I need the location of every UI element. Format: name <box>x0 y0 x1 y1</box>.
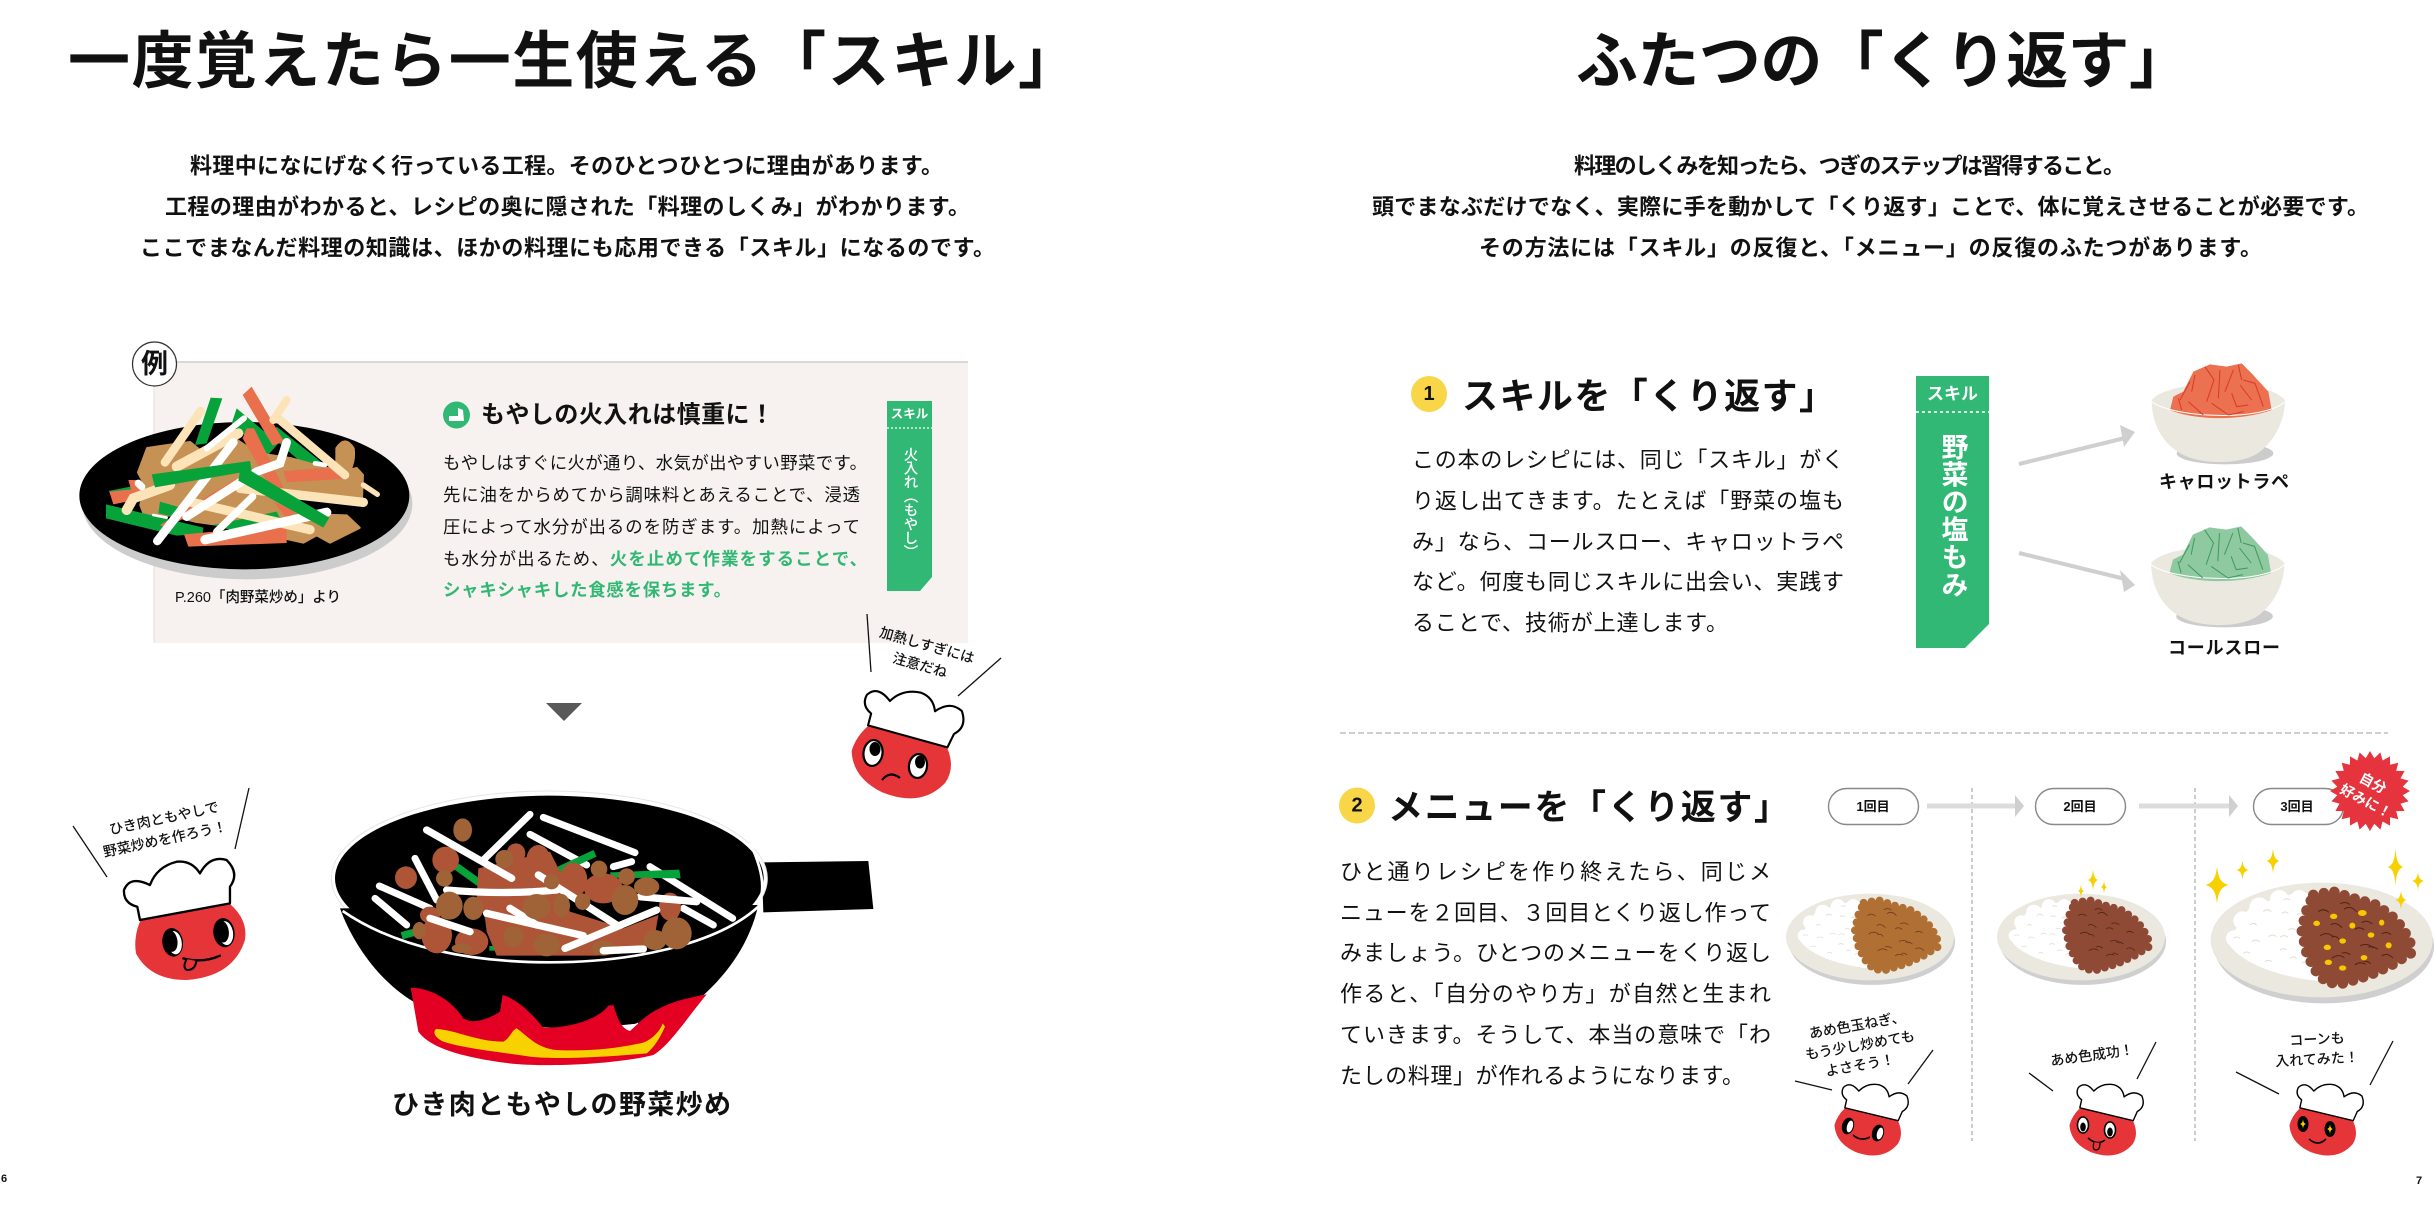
intro text: right page: 料理のしくみを知ったら、つぎのステップは習得すること。 <box>1574 154 2125 178</box>
icon: arm skill mark <box>443 402 470 428</box>
sparkles: plate 3 <box>2206 848 2424 910</box>
illustration: curry plate 2 <box>1997 894 2166 985</box>
panel: example skill card <box>79 342 968 643</box>
flame <box>411 988 707 1065</box>
tag: skill ribbon <box>887 401 932 591</box>
speech: chef 3: 入れてみた！ <box>2275 1049 2359 1069</box>
character: chef 1 <box>1821 1070 1918 1166</box>
arrow: down triangle <box>546 703 582 721</box>
starburst badge: 自分 <box>2357 769 2389 797</box>
caption: recipe reference: P.260「肉野菜炒め」より <box>175 589 341 606</box>
tag: skill ribbon: 火入れ（もやし） <box>902 447 918 559</box>
label: coleslaw: コールスロー <box>2168 638 2280 658</box>
dish name: ひき肉ともやしの野菜炒め <box>392 1090 731 1120</box>
label: carrot rapee: キャロットラペ <box>2159 472 2289 492</box>
intro text: right page <box>1372 154 2369 260</box>
section 1 text <box>1412 448 1844 636</box>
section 1 text: この本のレシピには、同じ「スキル」がく <box>1412 448 1844 472</box>
section 2 text: たしの料理」が作れるようになります。 <box>1340 1064 1744 1088</box>
step pill: third time: 3回目 <box>2280 799 2314 814</box>
title: right page: ふたつの「くり返す」 <box>1576 28 2191 96</box>
character: happy chef <box>124 859 245 980</box>
page number 6: 6 <box>1 1173 7 1185</box>
tag: salt-massage skill ribbon <box>1916 376 1989 648</box>
intro text: right page: 頭でまなぶだけでなく、実際に手を動かして「くり返す」ことで、体に覚えさせることが必要です。 <box>1372 194 2369 220</box>
intro text: left page <box>140 154 995 260</box>
step pill: second time: 2回目 <box>2063 799 2097 814</box>
speech: chef 1: よさそう！ <box>1824 1051 1896 1079</box>
sparkles: plate 2 <box>2078 869 2107 898</box>
badge: example: 例 <box>141 349 168 379</box>
section 2 text: 作ると、「自分のやり方」が自然と生まれ <box>1340 982 1771 1006</box>
tag: salt-massage skill ribbon: スキル <box>1927 384 1978 404</box>
character: chef 3 <box>2276 1070 2373 1166</box>
illustration: curry plate 3 with corn <box>2211 883 2434 1003</box>
speech: chef 1 <box>1795 1009 1933 1090</box>
pan contents <box>375 814 733 956</box>
title: left page: 一度覚えたら一生使える「スキル」 <box>68 28 1080 96</box>
speech: right chef: 加熱しすぎには <box>878 624 976 666</box>
intro text: right page: その方法には「スキル」の反復と、「メニュー」の反復のふたつがあります。 <box>1479 236 2262 260</box>
character: chef 2 <box>2056 1070 2153 1166</box>
speech: left chef <box>73 788 249 877</box>
intro text: left page: 料理中になにげなく行っている工程。そのひとつひとつに理由があります。 <box>190 154 943 178</box>
step pill: third time <box>2254 788 2344 824</box>
text block: skill description <box>443 453 867 600</box>
arrow: to carrot bowl <box>2019 425 2135 464</box>
speech: left chef: ひき肉ともやしで <box>108 799 220 837</box>
section 1 text: り返し出てきます。たとえば「野菜の塩も <box>1412 488 1844 514</box>
speech: left chef: 野菜炒めを作ろう！ <box>102 818 228 860</box>
arrow: step 1 to 2 <box>1927 795 2024 817</box>
text block: skill description: も水分が出るため、火を止めて作業をすることで、 <box>443 549 867 569</box>
section 2 text <box>1340 860 1771 1088</box>
intro text: left page: 工程の理由がわかると、レシピの奥に隠された「料理のしくみ」がわかります。 <box>165 194 970 220</box>
text block: skill description: シャキシャキした食感を保ちます。 <box>443 580 731 600</box>
section 2 text: ニューを２回目、３回目とくり返し作って <box>1340 900 1771 926</box>
speech: chef 2 <box>2029 1041 2156 1091</box>
speech: chef 3: コーンも <box>2289 1030 2345 1048</box>
heading: skill name: もやしの火入れは慎重に！ <box>481 402 774 428</box>
illustration: frying pan over flame <box>331 791 873 1065</box>
speech: right chef: 注意だね <box>891 650 949 680</box>
section 2 text: ていきます。そうして、本当の意味で「わ <box>1340 1022 1771 1048</box>
divider <box>1340 732 2388 734</box>
arrow: step 2 to 3 <box>2139 795 2238 817</box>
section 1 text: み」なら、コールスロー、キャロットラペ <box>1412 530 1844 554</box>
text block: skill description: 圧によって水分が出るのを防ぎます。加熱によって <box>443 517 860 537</box>
speech: chef 1: もう少し炒めても <box>1804 1027 1916 1063</box>
pan bowl <box>340 905 758 1028</box>
section 2 heading: 2 <box>1351 794 1363 816</box>
speech: chef 1: あめ色玉ねぎ、 <box>1808 1009 1906 1041</box>
pan handle <box>762 861 873 912</box>
character: worried chef <box>831 670 977 816</box>
text block: skill description: もやしはすぐに火が通り、水気が出やすい野菜です。 <box>443 453 867 473</box>
illustration: coleslaw bowl <box>2151 526 2284 627</box>
illustration: stir-fried vegetables on plate <box>79 387 412 579</box>
section 1 heading: 1 <box>1423 383 1435 405</box>
starburst badge: 好みに！ <box>2338 781 2394 821</box>
starburst badge <box>2330 751 2410 831</box>
section 2 text: みましょう。ひとつのメニューをくり返し <box>1340 940 1771 966</box>
intro text: left page: ここでまなんだ料理の知識は、ほかの料理にも応用できる「スキル」になるのです。 <box>140 236 995 260</box>
badge: example <box>132 342 176 386</box>
vertical separators <box>1972 788 2195 1141</box>
section 1 text: など。何度も同じスキルに出会い、実践す <box>1412 570 1844 594</box>
page number 7: 7 <box>2416 1175 2422 1187</box>
tag: skill ribbon: スキル <box>891 407 929 421</box>
section 1 heading: スキルを「くり返す」 <box>1462 376 1835 416</box>
speech: chef 2: あめ色成功！ <box>2049 1041 2135 1069</box>
section 2 text: ひと通りレシピを作り終えたら、同じメ <box>1340 860 1771 884</box>
speech: chef 3 <box>2236 1030 2393 1094</box>
step pill: second time <box>2036 788 2126 824</box>
arrow: to coleslaw bowl <box>2019 553 2135 592</box>
tag: salt-massage skill ribbon: 野菜の塩もみ <box>1938 433 1968 598</box>
section 2 heading: メニューを「くり返す」 <box>1388 788 1789 828</box>
text block: skill description: 先に油をからめてから調味料とあえることで、浸透 <box>443 485 860 505</box>
section 1 text: ることで、技術が上達します。 <box>1412 610 1728 636</box>
illustration: carrot bowl <box>2152 363 2285 464</box>
step pill: first time <box>1828 788 1918 824</box>
illustration: curry plate 1 <box>1786 894 1955 985</box>
speech: right chef <box>867 614 1001 696</box>
step pill: first time: 1回目 <box>1856 799 1890 814</box>
